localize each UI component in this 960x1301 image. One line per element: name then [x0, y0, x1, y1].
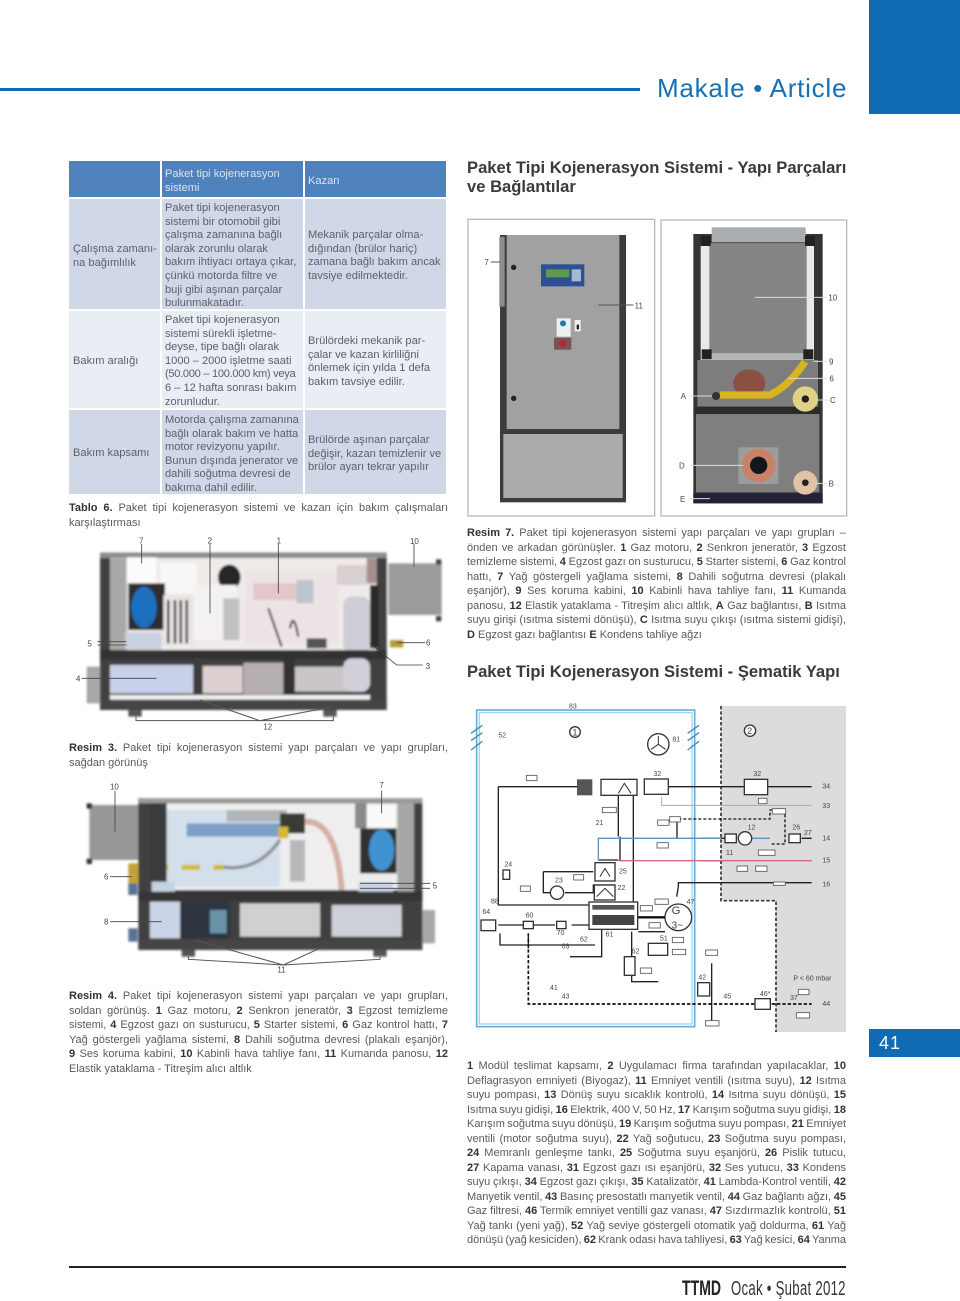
row 2 cogeneration text: sistemi sürekli işletme- [165, 328, 277, 340]
caption: Resim 7: temizleme sistemi, 4 Egzost gazı on susturucu, 5 Starter sistemi, 6 Gaz kontrol [467, 556, 846, 568]
photo: cogeneration unit right side view (Resim 3) [76, 536, 442, 731]
schematic legend text: dönüşü (yağ kesiciden), 62 Krank odası hava tahliyesi, 63 Yağ kesici, 64 Yanma [467, 1234, 846, 1246]
table row 3 background [69, 410, 446, 494]
photo: rear view with labelled connections (Resim 7 right): B [829, 479, 834, 488]
heading: Yapı Parçaları [467, 158, 846, 196]
photo: cogeneration unit left side view (Resim 4): 5 [433, 882, 438, 891]
schematic diagram: system layout: 46* [760, 991, 771, 998]
row 3 cogeneration text: bağlı olarak bakım ve hatta [165, 428, 298, 440]
schematic diagram: system layout [471, 704, 846, 1032]
row 2 cogeneration text: Paket tipi kojenerasyon [165, 314, 280, 326]
photo: cogeneration unit left side view (Resim 4): 7 [379, 781, 384, 790]
row 1 boiler text: zamana bağlı bakım ancak [308, 256, 441, 268]
photo: cogeneration unit left side view (Resim 4): 10 [110, 782, 119, 791]
schematic diagram: system layout: 88 [491, 898, 499, 905]
schematic diagram: system layout: 83 [569, 704, 577, 711]
photo: cogeneration unit left side view (Resim 4): 11 [277, 966, 286, 975]
table column divider 2 [303, 161, 305, 494]
caption: Resim 4: Elastik yataklama - Titreşim alıcı altlık [69, 1063, 252, 1075]
schematic diagram: system layout: 42 [698, 974, 706, 981]
caption: Resim 3: Resim 3. Paket tipi kojenerasyon sistemi yapı parçaları ve yapı grupları, [69, 742, 448, 754]
schematic diagram: system layout: 34 [822, 783, 830, 790]
photo: front view panel (Resim 7 left): 11 [635, 301, 644, 310]
row 3 boiler text: Brülörde aşınan parçalar [308, 434, 429, 446]
caption: Resim 7: önden ve arkadan görünüşler. 1 Gaz motoru, 2 Senkron jeneratör, 3 Egzost [467, 542, 846, 554]
schematic diagram: system layout: 37 [790, 995, 798, 1002]
row 2 cogeneration text: 6 – 12 hafta sonrası bakım [165, 382, 296, 394]
caption: Resim 7: eşanjör), 9 Ses koruma kabini, 10 Kabinli hava tahliye fanı, 11 Kumanda [467, 585, 846, 597]
caption: Tablo 6: Tablo 6. Paket tipi kojenerasyon sistemi ve kazan için bakım çalışmaları [69, 502, 448, 514]
caption: Resim 7: panosu, 12 Elastik yataklama - Titreşim alıcı altlık, A Gaz bağlantısı, B Isıtma [467, 600, 846, 612]
photo: rear view with labelled connections (Resim 7 right): D [679, 461, 685, 470]
row 1 cogeneration text [165, 202, 296, 309]
schematic diagram: system layout: 32 [753, 771, 761, 778]
schematic diagram: system layout: 61 [606, 932, 614, 939]
photo: rear view with labelled connections (Resim 7 right): 6 [829, 374, 834, 383]
schematic diagram: system layout: 70 [557, 930, 565, 937]
schematic diagram: system layout: 27 [804, 830, 812, 837]
row 2 cogeneration text: deyse, tipe bağlı olarak [165, 341, 279, 353]
caption: Resim 7: hattı, 7 Yağ göstergeli yağlama sistemi, 8 Dahili soğutma devresi (plakalı [467, 570, 846, 582]
schematic diagram: system layout: 62 [632, 948, 640, 955]
caption: Resim 7: suyu girişi (ısıtma sistemi dönüşü), C Isıtma suyu çıkışı (ısıtma sistemi gidişi), [467, 614, 846, 626]
photo: cogeneration unit left side view (Resim 4): 8 [104, 917, 109, 926]
schematic diagram: system layout: 47 [687, 899, 695, 906]
heading: Yapı Parçaları: Paket Tipi Kojenerasyon Sistemi - Yapı Parçaları [467, 158, 846, 177]
row 2 cogeneration text: (50.000 – 100.000 km) veya [165, 368, 295, 380]
row 3 boiler text: brülor ayarı tekrar yapılır [308, 461, 429, 473]
caption: Resim 7: D Egzost gazı bağlantısı E Kondens tahliye ağzı [467, 628, 702, 640]
row 1 cogeneration text: sistemi bir otomobil gibi [165, 216, 280, 228]
row 1 cogeneration text: çünkü motorda filtre ve [165, 270, 277, 282]
schematic diagram: system layout: 63 [562, 943, 570, 950]
schematic diagram: system layout: 81 [672, 737, 680, 744]
photo: cogeneration unit right side view (Resim 3): 1 [277, 536, 282, 545]
schematic legend text: Karışım soğutma suyu dönüşü, 19 Karışım soğutma suyu pompası, 21 Emniyet [467, 1118, 846, 1130]
row 2 boiler text [308, 335, 430, 388]
header: Paket tipi kojenerasyon sistemi [165, 168, 280, 194]
row 3 cogeneration text: dahili soğutma devresi de [165, 468, 291, 480]
photo: cogeneration unit right side view (Resim 3): 12 [263, 722, 273, 731]
schematic legend text: 1 Modül teslimat kapsamı, 2 Uygulamacı firma tarafından yapılacaklar, 10 [467, 1060, 846, 1072]
schematic diagram: system layout: 15 [822, 858, 830, 865]
caption: Resim 4: 9 Ses koruma kabini, 10 Kabinli hava tahliye fanı, 11 Kumanda panosu, 12 [69, 1048, 448, 1060]
header: Paket tipi kojenerasyon sistemi: Paket tipi kojenerasyon [165, 168, 280, 180]
schematic diagram: system layout: 3~ [672, 920, 683, 931]
row 2 cogeneration text: zorunludur. [165, 396, 220, 408]
header: Paket tipi kojenerasyon sistemi: sistemi [165, 182, 200, 194]
caption: Resim 3: sağdan görünüş [69, 757, 148, 769]
row 1 cogeneration text: buji gibi aşınan parçalar [165, 284, 282, 296]
row 1 cogeneration text: bulunmakatadır. [165, 297, 244, 309]
schematic legend text: Gaz filtresi, 46 Termik emniyet ventilli gaz vanası, 47 Sızdırmazlık kontrolü, 51 [467, 1205, 846, 1217]
schematic legend text: ventili (motor soğutma suyu), 22 Yağ soğutucu, 23 Soğutma suyu pompası, [467, 1132, 846, 1144]
row 3 boiler text: değişir, kazan temizlenir ve [308, 448, 441, 460]
row 2 cogeneration text: 1000 – 2000 işletme saati [165, 355, 291, 367]
schematic diagram: system layout: 11 [726, 850, 733, 857]
row 2 boiler text: önlemek için yılda 1 defa [308, 362, 430, 374]
row 3 cogeneration text: Motorda çalışma zamanına [165, 414, 299, 426]
row 1 cogeneration text: çalışma zamanına bağlı [165, 229, 282, 241]
page number tab: 41 [879, 1033, 901, 1053]
schematic diagram: system layout: 64 [482, 909, 490, 916]
row label: Çalışma zamanına bağımlılık: Çalışma zamanı- [73, 243, 157, 255]
schematic diagram: system layout: 26 [792, 824, 800, 831]
heading: Şematik Yapı: Paket Tipi Kojenerasyon Sistemi - Şematik Yapı [467, 662, 840, 681]
row 3 boiler text [308, 434, 441, 473]
schematic diagram: system layout: G [672, 905, 680, 917]
row 3 cogeneration text: motor revizyonu yapılır. [165, 441, 280, 453]
photo: rear view with labelled connections (Resim 7 right): C [830, 396, 836, 405]
header blue corner block [869, 0, 960, 114]
row label: Çalışma zamanına bağımlılık: na bağımlılık [73, 257, 136, 269]
schematic legend text: 27 Kapama vanası, 31 Egzost gazı ısı eşanjörü, 32 Ses yutucu, 33 Kondens [467, 1162, 846, 1174]
caption: Resim 7: Resim 7. Paket tipi kojenerasyon sistemi yapı parçaları ve yapı grupları – [467, 527, 846, 539]
page number tab [869, 1029, 960, 1057]
row label: Bakım aralığı: Bakım aralığı [73, 355, 138, 367]
photo: cogeneration unit right side view (Resim 3): 5 [87, 640, 92, 649]
caption: Tablo 6 [69, 502, 448, 529]
row 1 boiler text: Mekanik parçalar olma- [308, 229, 423, 241]
schematic diagram: system layout: 14 [822, 835, 830, 842]
photo: rear view with labelled connections (Resim 7 right): 9 [829, 357, 834, 366]
row 2 boiler text: Brülördeki mekanik par- [308, 335, 425, 347]
schematic diagram: system layout: 41 [550, 985, 558, 992]
row 2 boiler text: bakım tavsiye edilir. [308, 376, 405, 388]
caption: Resim 3 [69, 742, 448, 769]
photo: cogeneration unit left side view (Resim 4) [87, 781, 438, 975]
schematic diagram: system layout: 12 [748, 824, 756, 831]
row 3 cogeneration text: bakıma dahil edilir. [165, 482, 257, 494]
schematic legend text: Isıtma suyu gidişi, 16 Elektrik, 400 V, 50 Hz, 17 Karışım soğutma suyu gidişi, 18 [467, 1104, 846, 1116]
table header row [69, 161, 446, 197]
schematic diagram: system layout: 45 [723, 993, 731, 1000]
schematic diagram: system layout: 43 [562, 993, 570, 1000]
schematic diagram: system layout: 25 [619, 868, 627, 875]
footer: TTMD: TTMD [682, 1277, 721, 1300]
photo: front view panel (Resim 7 left) [468, 219, 655, 516]
row 1 cogeneration text: bakım ihtiyacı ortaya çıkar, [165, 256, 296, 268]
table row 1 background [69, 199, 446, 309]
photo: cogeneration unit right side view (Resim 3): 6 [426, 638, 431, 647]
schematic legend text: 24 Memranlı genleşme tankı, 25 Soğutma suyu eşanjörü, 26 Pislik tutucu, [467, 1147, 846, 1159]
schematic diagram: system layout: 33 [822, 803, 830, 810]
schematic legend text: suyu çıkışı, 34 Egzost gazı çıkışı, 35 Katalizatör, 41 Lambda-Kontrol ventili, 42 [467, 1176, 846, 1188]
row 3 cogeneration text: Bunun dışında jenerator ve [165, 455, 298, 467]
caption: Resim 7 [467, 527, 846, 640]
schematic diagram: system layout: 23 [555, 878, 563, 885]
photo: cogeneration unit right side view (Resim 3): 4 [76, 674, 81, 683]
footer: date: Ocak • Şubat 2012 [731, 1278, 846, 1300]
caption: Resim 4 [69, 990, 448, 1075]
schematic diagram: system layout: 44 [822, 1001, 830, 1008]
schematic diagram: system layout: 24 [504, 862, 512, 869]
caption: Resim 4: Yağ göstergeli yağlama sistemi, 8 Dahili soğutma devresi (plakalı eşanjör), [69, 1034, 448, 1046]
header blue rule [0, 88, 640, 91]
caption: Tablo 6: karşılaştırması [69, 517, 141, 529]
photo: rear view with labelled connections (Resim 7 right): A [681, 392, 687, 401]
comparison table [69, 161, 446, 494]
row 2 cogeneration text [165, 314, 296, 408]
schematic diagram: system layout: 51 [660, 936, 668, 943]
photo: cogeneration unit right side view (Resim 3): 2 [208, 536, 213, 545]
schematic legend text [467, 1060, 846, 1246]
row 1 boiler text: dığından (brülor hariç) [308, 243, 417, 255]
schematic diagram: system layout: 16 [822, 882, 830, 889]
schematic diagram: system layout: 1 [572, 727, 578, 737]
schematic diagram: system layout: 22 [618, 885, 626, 892]
photo: cogeneration unit right side view (Resim 3): 3 [426, 662, 431, 671]
row 1 boiler text [308, 229, 441, 282]
schematic legend text: Manyetik ventil, 43 Basınç presostatlı manyetik ventil, 44 Gaz bağlantı ağzı, 45 [467, 1190, 846, 1202]
caption: Resim 4: soldan görünüş. 1 Gaz motoru, 2 Senkron jeneratör, 3 Egzost temizleme [69, 1005, 448, 1017]
heading: Yapı Parçaları: ve Bağlantılar [467, 177, 576, 196]
row label: Çalışma zamanına bağımlılık [73, 243, 157, 269]
caption: Resim 4: sistemi, 4 Egzost gazı on susturucu, 5 Starter sistemi, 6 Gaz kontrol hattı, 7 [69, 1019, 448, 1031]
schematic legend text: suyu pompası, 13 Dönüş suyu sıcaklık kontrolü, 14 Isıtma suyu dönüşü, 15 [467, 1089, 846, 1101]
photo: rear view with labelled connections (Resim 7 right): 10 [828, 293, 838, 302]
photo: front view panel (Resim 7 left): 7 [484, 258, 489, 267]
row 3 cogeneration text [165, 414, 299, 494]
schematic diagram: system layout: 32 [653, 771, 661, 778]
header: Kazan: Kazan [308, 175, 339, 187]
schematic diagram: system layout: 62 [580, 937, 588, 944]
table row 2 background [69, 311, 446, 408]
schematic legend text: Deflagrasyon emniyeti (Biyogaz), 11 Emniyet ventili (ısıtma suyu), 12 Isıtma [467, 1074, 846, 1086]
footer rule [69, 1266, 846, 1268]
row 2 boiler text: çalar ve kazan kirliliğni [308, 349, 419, 361]
row 1 boiler text: tavsiye edilmektedir. [308, 270, 408, 282]
photo: cogeneration unit right side view (Resim 3): 10 [410, 537, 419, 546]
schematic diagram: system layout: 21 [596, 820, 604, 827]
schematic diagram: system layout: 52 [498, 732, 506, 739]
schematic legend text: Yağ tankı (yeni yağ), 52 Yağ seviye göstergeli otomatik yağ doldurma, 61 Yağ [467, 1220, 846, 1232]
row 1 cogeneration text: olarak zorunlu olarak [165, 243, 268, 255]
photo: cogeneration unit right side view (Resim 3): 7 [139, 536, 144, 545]
schematic diagram: system layout: 2 [747, 726, 752, 736]
caption: Resim 4: Resim 4. Paket tipi kojenerasyon sistemi yapı parçaları ve yapı grupları, [69, 990, 448, 1002]
schematic diagram: system layout: 60 [526, 912, 534, 919]
photo: rear view with labelled connections (Resim 7 right): E [680, 495, 685, 504]
row 1 cogeneration text: Paket tipi kojenerasyon [165, 202, 280, 214]
photo: cogeneration unit left side view (Resim 4): 6 [104, 872, 109, 881]
table column divider 1 [160, 161, 162, 494]
schematic diagram: system layout: P < 60 mbar [793, 976, 832, 983]
row label: Bakım kapsamı: Bakım kapsamı [73, 447, 149, 459]
section title: Makale Article: Makale • Article [657, 73, 847, 103]
photo: rear view with labelled connections (Resim 7 right) [661, 220, 847, 516]
